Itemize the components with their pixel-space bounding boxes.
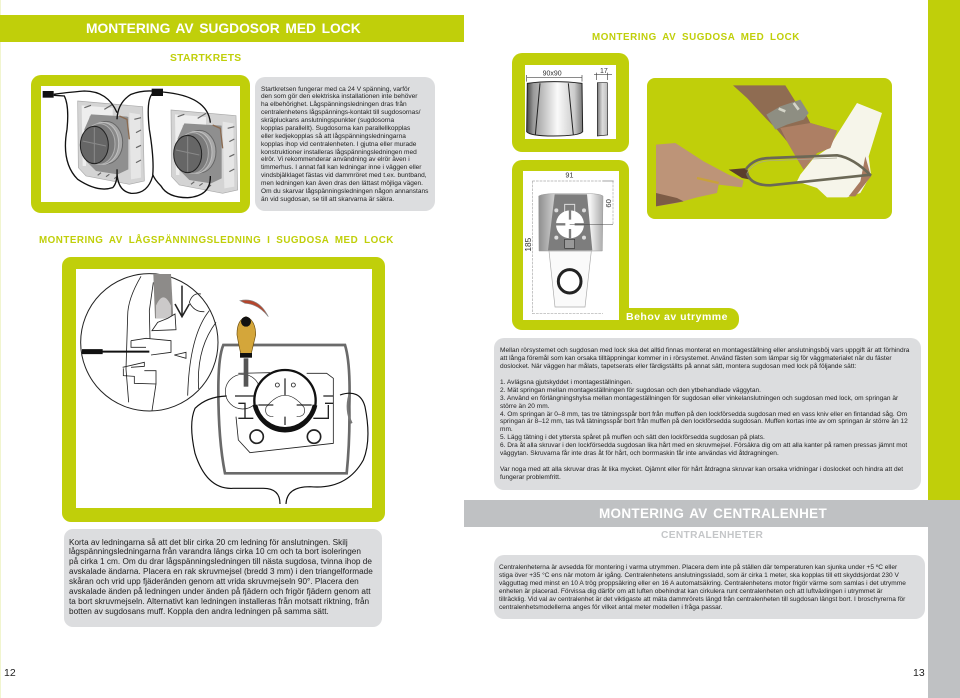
text block: space requirement: fungerar problemfritt. (500, 474, 561, 481)
illustration: two suction boxes with wiring (43, 89, 238, 198)
illustration: box dimensions: 185 (523, 237, 533, 252)
panel: space requirement background (494, 338, 921, 490)
text block: startkrets description: elrör. Vi rekommenderar användning av elrör även i (261, 156, 410, 163)
header bar: centralenhet: MONTERING AV CENTRALENHET (599, 506, 827, 521)
text block: space requirement: 6. Dra åt alla skruvar i den lockförsedda sugdosan lika hårt med en skruvmejsel. Försäkra dig om att alla kanter på ramen pressas jämnt mot (500, 442, 907, 449)
text block: wiring instructions: avskalade ändarna. Placera en rak skruvmejsel (bredd 3 mm) i den triangelformade (69, 567, 373, 576)
panel: saw photo (647, 78, 892, 219)
heading: lågspänningsledning: MONTERING AV LÅGSPÄNNINGSLEDNING I SUGDOSA MED LOCK (39, 235, 394, 246)
text block: startkrets description: eller kedjekopplas så att lågspänningsledningarna (261, 133, 406, 140)
text block: wiring instructions: lågspänningsledningarna från varandra längs cirka 10 cm och ta bort isoleringen (69, 547, 361, 556)
text block: startkrets description: ha elbehörighet. Lågspänningsledningen dras från (261, 101, 407, 108)
header bar: sugdosor (0, 15, 464, 42)
text block: space requirement: doslocket. När väggen har målats, tapetserats eller färdigställts på annat sätt, montera sugdosan med lock på följande sätt: (500, 363, 856, 370)
panel: startkrets text background (255, 77, 435, 211)
text block: startkrets description: Startkretsen fungerar med ca 24 V spänning, varför (261, 86, 410, 92)
panel: wiring text background (64, 529, 382, 627)
header bar: sugdosor: MONTERING AV SUGDOSOR MED LOCK (86, 21, 361, 36)
tab: Behov av utrymme: Behov av utrymme (626, 311, 728, 323)
text block: space requirement: mm. (500, 426, 513, 433)
tab: Behov av utrymme (626, 308, 739, 330)
text block: space requirement: 4. Om springan är 0–8 mm, tas tre tätningsspår bort från muffen på den lockförsedda sugdosan med en vass kniv eller en fintandad såg. Om (500, 410, 907, 418)
text block: space requirement: Mellan rörsystemet och sugdosan med lock ska det alltid finnas monterat en montageställning eller anslutningsböj vars uppgift är att förhindra (500, 347, 909, 354)
text block: centralenhet: tillräcklig. Vid val av centralenhet är det viktigaste att mäta dammrörets längd från centralenheten till sugdosan längst bort. I broschyrerna för (499, 596, 905, 602)
illustration: lid dimensions: 90x90 (543, 71, 562, 78)
text block: space requirement: att långa föremål som kan orsaka tilltäppningar kommer in i rörsystemet. Använd fästen som lämpar sig för väggmaterialet när du fäster (500, 355, 892, 362)
text block: wiring instructions (69, 538, 373, 616)
panel: measure box with tab (512, 160, 629, 330)
right side strip (928, 0, 960, 698)
text block: centralenhet: Centralenheterna är avsedda för montering i varma utrymmen. Placera dem inte på ställen där temperaturen kan sjunka under +5 ºC eller (499, 564, 897, 570)
heading: centralenheter: CENTRALENHETER (661, 530, 763, 541)
illustration: box dimensions: 60 (604, 199, 613, 208)
illustration: lid dimensions (527, 68, 612, 136)
text block: startkrets description: konstruktioner installeras lågspänningsledningen med (261, 148, 417, 156)
text block: space requirement: 2. Mät springan mellan montageställningen för sugdosan och den ytbehandlade väggytan. (500, 387, 761, 394)
text block: startkrets description: men ledningen kan även dras den lättast möjliga vägen. (261, 180, 423, 187)
text block: space requirement (500, 347, 910, 481)
panel: wiring illustration (62, 257, 385, 522)
illustration: box dimensions: 91 (565, 170, 573, 179)
illustration: lid dimensions: 17 (600, 68, 608, 75)
text block: wiring instructions: botten av sugdosans muff. Koppla den andra ledningen på samma sätt. (69, 607, 329, 616)
panel: startkrets photo (31, 75, 250, 213)
header bar: centralenhet (464, 500, 928, 527)
text block: space requirement: Var noga med att alla skruvar dras åt lika mycket. Ojämnt eller för hårt åtdragna skruvar kan orsaka vridningar i doslocket och hindra att det (500, 466, 903, 473)
text block: startkrets description: timmerhus. I annat fall kan ledningar inne i väggen eller (261, 164, 422, 171)
text block: wiring instructions: avskalade änden på ledningen under änden på fjädern och frigör fjädern genom att (69, 587, 371, 596)
text block: startkrets description: än vid sugdosan, se till att skarvarna är säkra. (261, 196, 394, 203)
text block: wiring instructions: på cirka 1 cm. Om du drar lågspänningsledningen till nästa sugdosa, tvinna ihop de (69, 557, 372, 566)
heading: sugdosa med lock: MONTERING AV SUGDOSA MED LOCK (592, 32, 800, 43)
page number 12: 12 (4, 667, 16, 679)
text block: space requirement: väggytan. Skruvarna får inte dras åt för hårt, och borrmaskin får inte användas vid åtdragningen. (500, 450, 779, 457)
illustration: box with wires and screwdriver (192, 300, 368, 504)
text block: startkrets description: Om du skarvar lågspänningsledningen någon annanstans (261, 188, 428, 195)
text block: space requirement: springan är 8–12 mm, tas två tätningsspår bort från muffen på den lockförsedda sugdosan. Muffen kortas inte av om springan är större än 12 (500, 418, 908, 425)
text block: centralenhet: stiga över +35 °C ens när motorn är igång. Centralenhetens anslutningssladd, som är cirka 1 meter, ska kopplas till ett skyddsjordat 230 V (499, 572, 899, 578)
text block: space requirement: 1. Avlägsna gjutskyddet i montageställningen. (500, 379, 632, 386)
text block: startkrets description: kopplas ihop vid centralenheten. I gjutna eller murade (261, 141, 416, 148)
text block: startkrets description: centralenhetens lågspännings-kontakt till sugdosornas/ (261, 109, 420, 116)
photo: sawing the lid (656, 85, 882, 206)
text block: wiring instructions: ta bort skruvmejseln. Alternativt kan ledningen installeras från motsatt riktning, från (69, 597, 369, 606)
text block: wiring instructions: skåran och vrid upp fjäderänden genom att vrida skruvmejseln 90°. Placera den (69, 577, 359, 586)
panel: measure lid (512, 53, 629, 152)
text block: centralenhet: centralenhetsmodellerna anges för vilket antal meter modellen i fråga passar. (499, 604, 722, 610)
left edge line (0, 0, 1, 698)
text block: wiring instructions: Korta av ledningarna så att det blir cirka 20 cm ledning för anslutningen. Skilj (69, 538, 348, 546)
text block: space requirement: 3. Använd en förlängningshylsa mellan montageställningen för sugdosan eller vinkelanslutningen och sugdosan med lock, om springan är (500, 395, 898, 402)
heading: startkrets: STARTKRETS (170, 53, 241, 64)
text block: startkrets description: den som gör den elektriska installationen inte behöver (261, 93, 418, 100)
illustration: wiring detail circle (81, 274, 218, 411)
text block: startkrets description: skräpluckans anslutningspunkter (sugdosorna (261, 117, 394, 124)
text block: centralenhet (499, 564, 906, 610)
page number 13: 13 (913, 667, 925, 679)
illustration: box dimensions (523, 170, 614, 314)
text block: space requirement: större än 20 mm. (500, 403, 549, 410)
panel: centralenhet text background (494, 555, 925, 619)
text block: startkrets description (261, 86, 428, 203)
text block: centralenhet: enheten är placerad. Förvissa dig därför om att luften obehindrat kan cirkulera runt centralenheten och att luftväxlingen i utrymmet är (499, 588, 883, 594)
text block: startkrets description: kopplas parallellt). Sugdosorna kan parallellkopplas (261, 125, 410, 132)
text block: startkrets description: vindsbjälklaget fästas vid dammröret med t.ex. buntband, (261, 172, 427, 179)
text block: space requirement: 5. Lägg tätning i det yttersta spåret på muffen och sätt den lockförsedda sugdosan på plats. (500, 434, 765, 441)
text block: centralenhet: vägguttag med minst en 10 A trög proppsäkring eller en 16 A automatsäkring. Centralenhetens motor frigör värme som samlas i det utrymme (499, 580, 906, 586)
